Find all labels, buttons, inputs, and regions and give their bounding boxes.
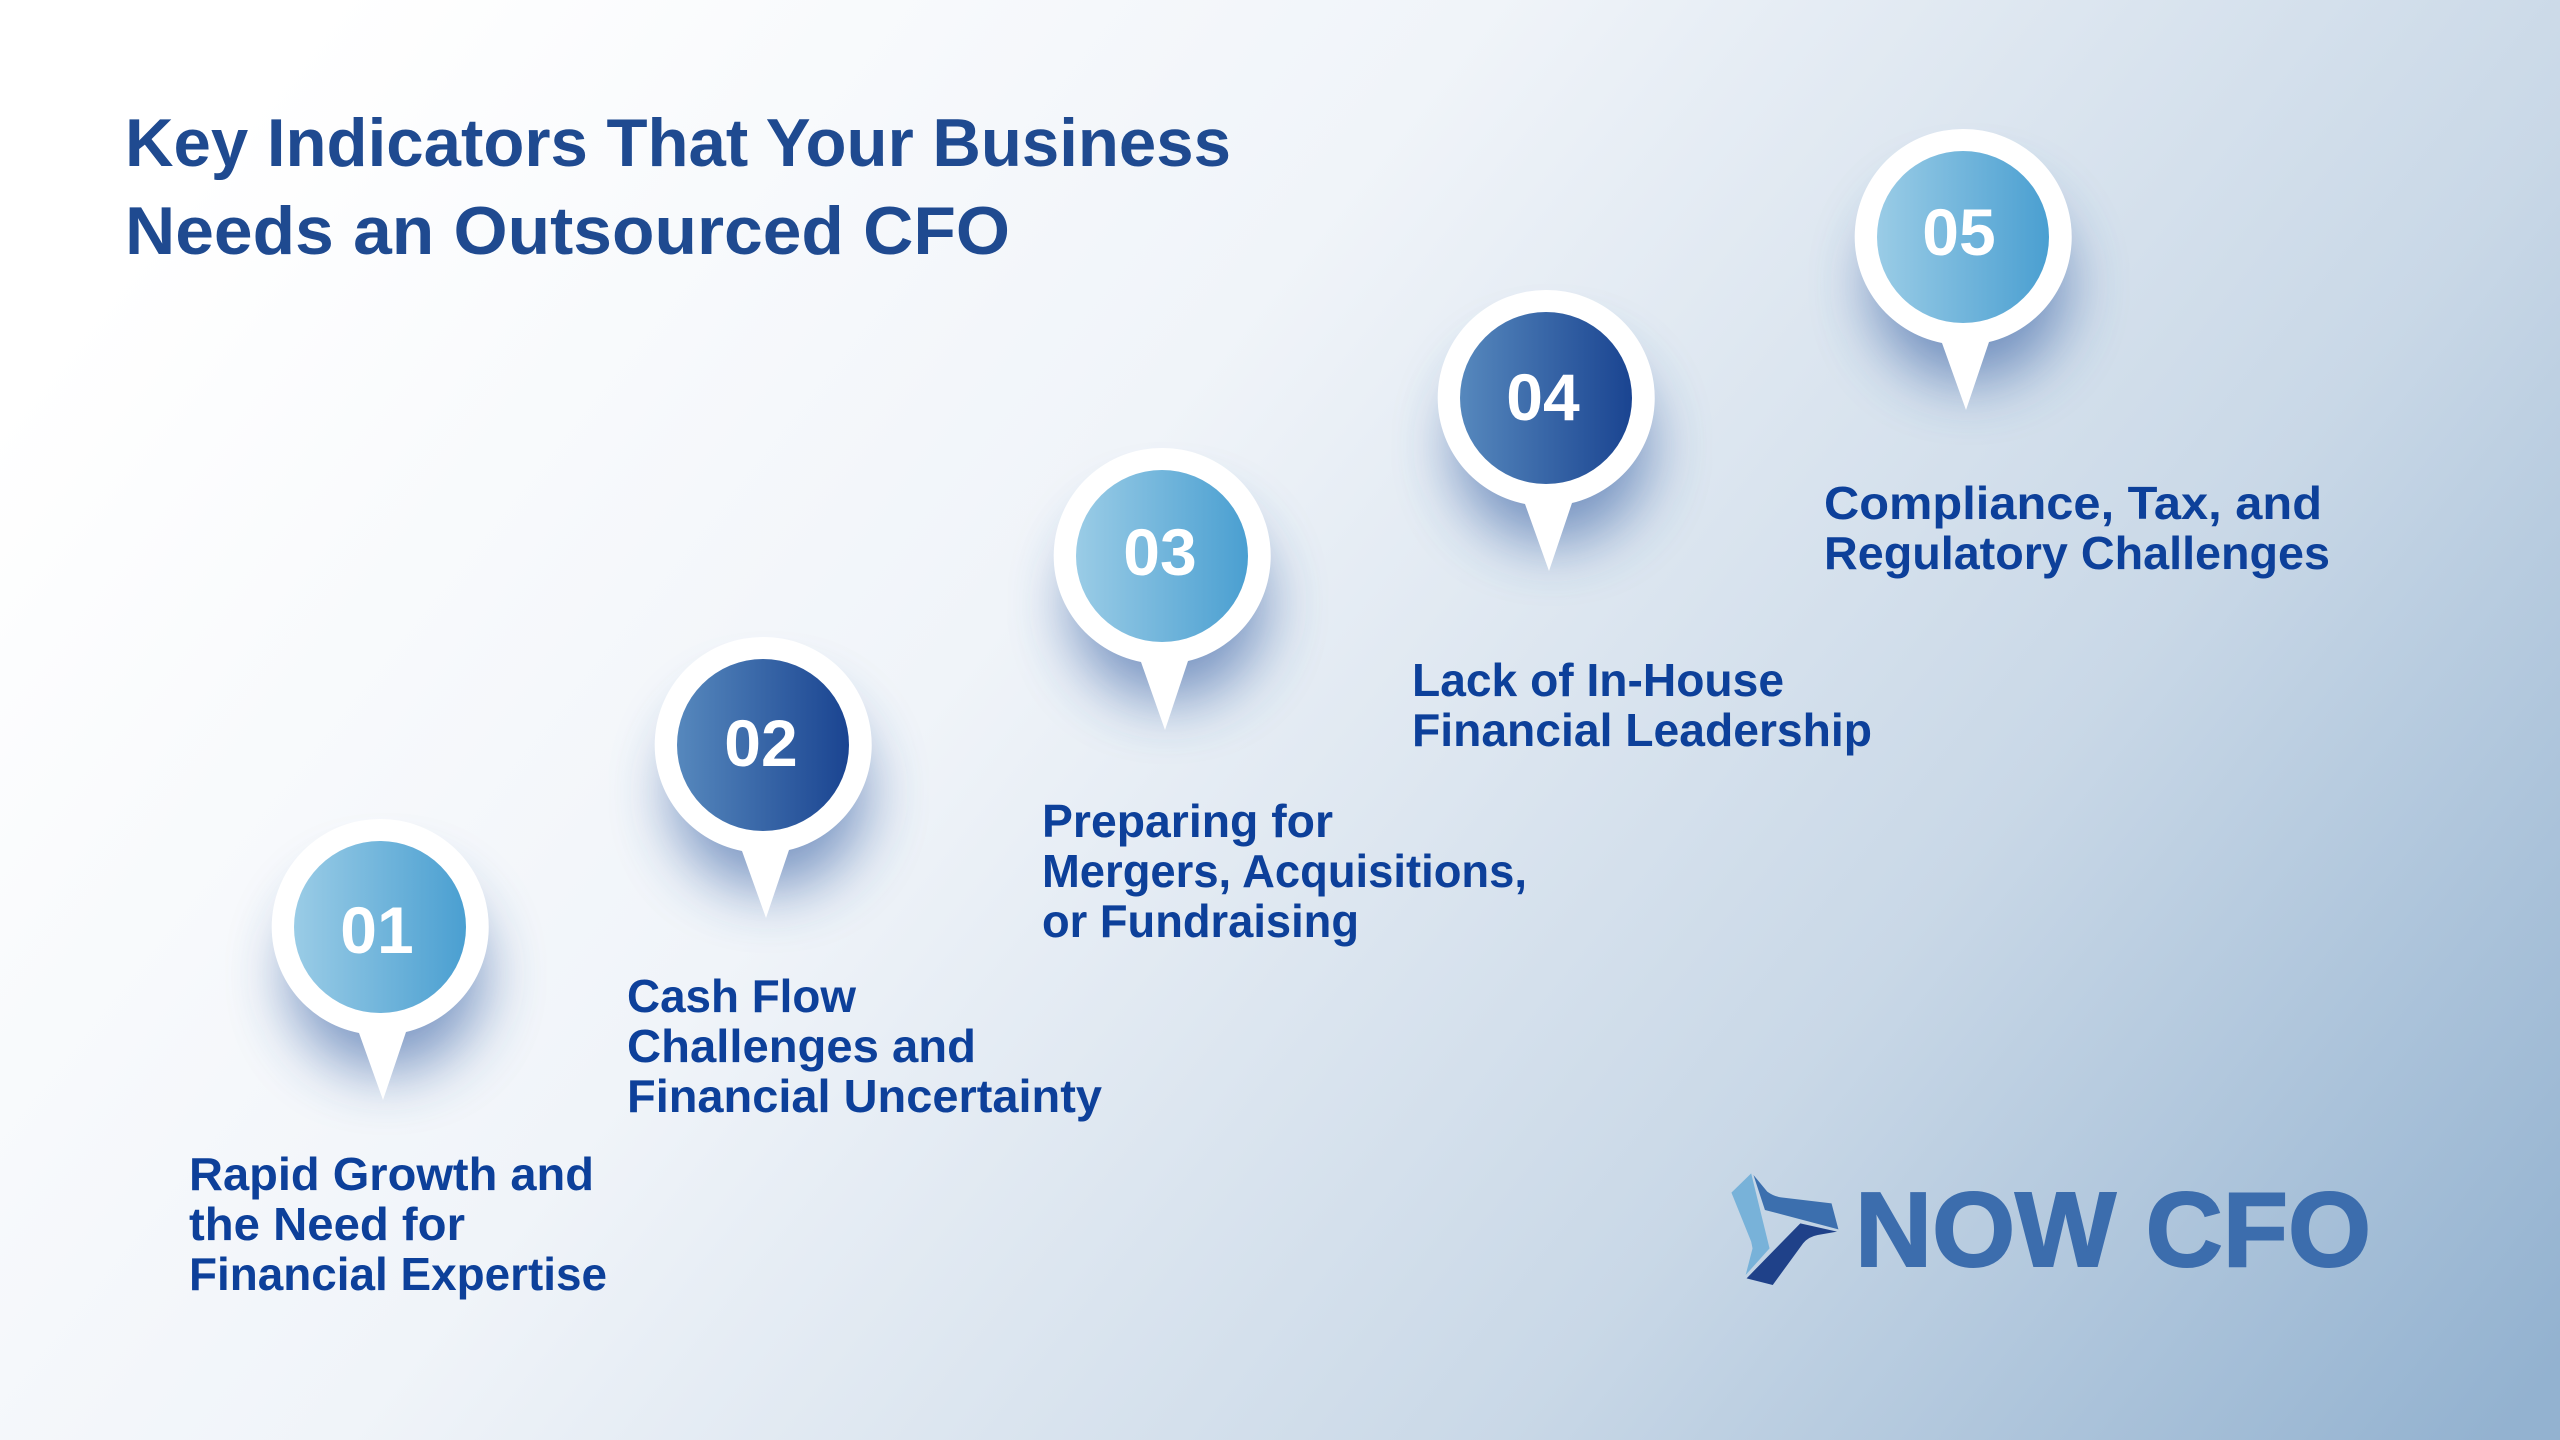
pin 04: 04 [1506, 360, 1580, 434]
label 03 [1042, 795, 1527, 947]
pin 04 [1438, 290, 1655, 571]
pin 03 [1054, 448, 1271, 730]
label 04: Financial Leadership [1412, 704, 1872, 756]
pin 03: 03 [1123, 515, 1197, 589]
label 01 [189, 1148, 607, 1300]
pin 05: 05 [1922, 195, 1996, 269]
pin 01 [272, 819, 489, 1100]
label 05: Regulatory Challenges [1824, 527, 2330, 579]
title [125, 105, 1231, 269]
label 01: Rapid Growth and [189, 1148, 594, 1200]
title: Needs an Outsourced CFO [125, 193, 1010, 269]
label 02 [627, 970, 1102, 1122]
label 04 [1412, 654, 1872, 756]
pin 01: 01 [340, 893, 414, 967]
label 01: the Need for [189, 1198, 465, 1250]
label 03: Preparing for [1042, 795, 1333, 847]
pin 02: 02 [724, 706, 798, 780]
label 04: Lack of In-House [1412, 654, 1784, 706]
label 01: Financial Expertise [189, 1248, 607, 1300]
pin 02 [655, 637, 872, 918]
label 03: or Fundraising [1042, 895, 1359, 947]
label 02: Challenges and [627, 1020, 976, 1072]
label 03: Mergers, Acquisitions, [1042, 845, 1527, 897]
label 05: Compliance, Tax, and [1824, 477, 2322, 529]
label 02: Cash Flow [627, 970, 856, 1022]
logo: NOW CFO [1731, 1171, 2371, 1289]
label 05 [1824, 477, 2330, 579]
label 02: Financial Uncertainty [627, 1070, 1102, 1122]
pin 05 [1855, 129, 2072, 410]
wordmark: NOW CFO [1855, 1171, 2371, 1289]
title: Key Indicators That Your Business [125, 105, 1231, 181]
icon: logo mark [1731, 1173, 1838, 1285]
